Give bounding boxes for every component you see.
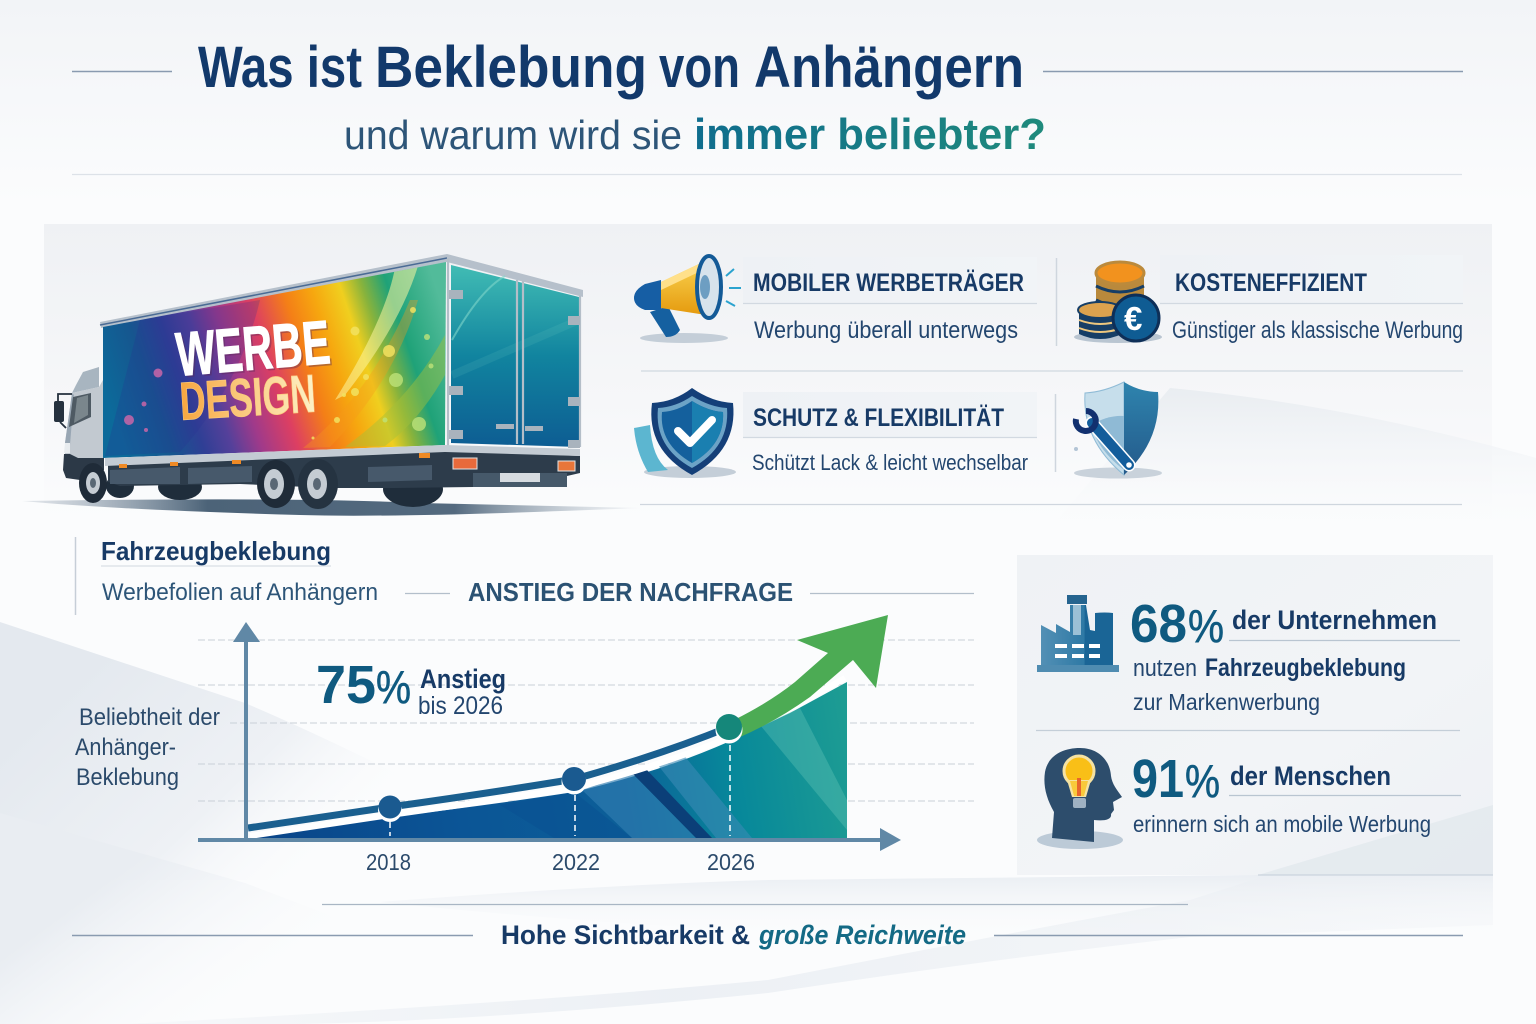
feature: Schutz und Flexibilität <box>634 388 1037 478</box>
wheels <box>79 459 338 509</box>
footer tagline: Hohe Sichtbarkeit & <box>501 920 750 950</box>
axes <box>244 632 248 838</box>
truck illustration <box>22 254 640 516</box>
cab <box>54 367 104 480</box>
text block: Fahrzeugbeklebung: Fahrzeugbeklebung <box>101 536 331 566</box>
stat: 68 percent: Fahrzeugbeklebung <box>1205 654 1406 682</box>
feature: Schutz und Flexibilität: SCHUTZ & FLEXIBILITÄT <box>753 404 1004 432</box>
feature: Schutz und Flexibilität: Schützt Lack & leicht wechselbar <box>752 450 1028 475</box>
stat: 68 percent: zur Markenwerbung <box>1133 689 1320 715</box>
data points <box>378 714 742 836</box>
feature: mobiler Werbeträger: Werbung überall unterwegs <box>754 317 1018 344</box>
growth arrow <box>734 615 888 738</box>
subtitle <box>344 110 1046 159</box>
white curve <box>250 678 845 836</box>
chassis <box>108 450 580 488</box>
icon: coins: € <box>1124 300 1142 337</box>
stat: 68 percent <box>1130 594 1460 715</box>
y-axis label <box>75 704 220 791</box>
line chart <box>198 615 974 875</box>
feature: shield and wrench icon <box>1056 382 1162 478</box>
x labels: 2018 <box>366 849 411 875</box>
stat: 91 percent: % <box>1185 755 1220 807</box>
title: Was ist <box>198 35 362 100</box>
title: Anhängern <box>754 35 1024 100</box>
y-axis label: Beklebung <box>76 764 179 791</box>
x labels: 2026 <box>707 849 755 875</box>
icon: shield with check <box>634 388 736 478</box>
trend line <box>248 727 729 828</box>
subtitle: und warum wird sie <box>344 112 682 158</box>
stat: 91 percent: der Menschen <box>1230 761 1391 791</box>
text block: Fahrzeugbeklebung: Werbefolien auf Anhängern <box>102 579 378 606</box>
feature: kosteneffizient: KOSTENEFFIZIENT <box>1175 269 1367 297</box>
roof <box>100 254 583 328</box>
feature: kosteneffizient <box>1056 255 1463 346</box>
side panel <box>103 262 446 458</box>
footer tagline <box>72 904 1463 950</box>
Werbe Design lettering <box>173 308 335 432</box>
stat: 68 percent: 68 <box>1130 594 1187 654</box>
Werbe Design lettering: WERBE <box>173 308 333 390</box>
callout: 75 percent: Anstieg <box>420 664 506 694</box>
title: Beklebung <box>375 35 647 100</box>
callout: 75 percent: 75 <box>316 655 376 715</box>
stat: 91 percent: 91 <box>1132 749 1184 809</box>
icon: megaphone <box>634 256 741 343</box>
title <box>198 35 1024 100</box>
icon: factory <box>1037 595 1119 672</box>
title: von <box>659 35 740 100</box>
text block: Fahrzeugbeklebung <box>76 536 378 615</box>
stat: 68 percent: % <box>1188 600 1224 652</box>
x labels <box>366 849 755 875</box>
callout: 75 percent: % <box>376 661 411 713</box>
x labels: 2022 <box>552 849 600 875</box>
footer tagline: große Reichweite <box>758 920 966 950</box>
subtitle: immer beliebter? <box>694 110 1046 159</box>
sill <box>105 445 580 466</box>
stat: 91 percent <box>1132 749 1461 837</box>
header rules <box>72 72 1463 174</box>
stat: 68 percent: nutzen <box>1133 655 1197 682</box>
Werbe Design lettering: DESIGN <box>178 364 317 432</box>
area under curve <box>250 682 847 838</box>
ground shadow <box>22 499 640 516</box>
chart heading: ANSTIEG DER NACHFRAGE <box>468 577 793 607</box>
feature: kosteneffizient: Günstiger als klassische Werbung <box>1172 317 1463 344</box>
far wheels <box>106 471 443 507</box>
Werbe Design lettering: WERBE <box>175 310 335 392</box>
stat: 68 percent: der Unternehmen <box>1232 605 1437 635</box>
rear doors <box>451 265 579 447</box>
feature: mobiler Werbeträger: MOBILER WERBETRÄGER <box>753 269 1024 297</box>
marker lights <box>119 453 430 468</box>
icon: coins <box>1074 262 1162 343</box>
feature: mobiler Werbeträger <box>634 256 1037 344</box>
icon: head with light bulb <box>1037 748 1123 849</box>
y-axis label: Anhänger- <box>75 734 176 761</box>
panel: statistics <box>1017 555 1493 875</box>
callout: 75 percent: bis 2026 <box>418 692 503 720</box>
y-axis label: Beliebtheit der <box>79 704 220 731</box>
stat: 91 percent: erinnern sich an mobile Werbung <box>1133 811 1431 837</box>
callout: 75 percent <box>316 655 506 720</box>
